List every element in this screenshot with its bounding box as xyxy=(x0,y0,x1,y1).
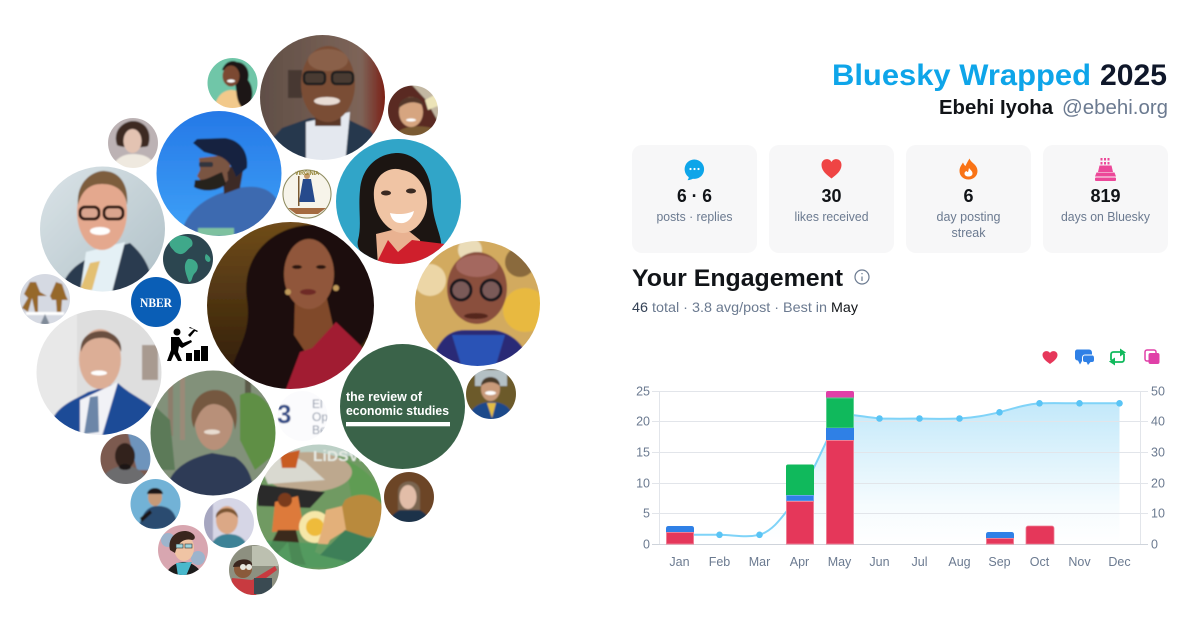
icon: birthday cake xyxy=(1095,158,1116,181)
avatar: woman with dark blazer xyxy=(383,471,435,523)
avatar: blurred text logo: Be xyxy=(312,423,327,437)
icon: info xyxy=(855,270,869,284)
avatar: man in cap on blue sky xyxy=(155,110,283,240)
value: 6: 6 xyxy=(964,186,974,206)
avatar: smiling man top right xyxy=(388,86,438,136)
label: day posting streak xyxy=(936,210,1001,240)
summary stats line: total · 3.8 avg/post · Best in xyxy=(652,299,827,315)
month labels: Sep xyxy=(988,555,1011,569)
left axis labels: 5 xyxy=(643,506,650,520)
month labels: Feb xyxy=(709,555,730,569)
avatar: man in blue jacket right xyxy=(465,368,517,420)
label: days on Bluesky: days on Bluesky xyxy=(1061,210,1151,224)
avatar: woman with bob hair xyxy=(107,117,159,170)
left axis labels: 20 xyxy=(636,414,650,428)
avatar bubble cluster xyxy=(19,33,547,596)
avatar: man in teal shirt xyxy=(203,497,255,549)
cumulative points xyxy=(676,400,1123,538)
right axis labels: 0 xyxy=(1151,538,1158,552)
month labels: Mar xyxy=(749,555,770,569)
avatar: man in forest xyxy=(148,368,280,498)
label: day posting streak: day posting xyxy=(936,210,1001,224)
avatar: cartoon woman on teal xyxy=(335,138,462,266)
user name and handle: Ebehi Iyoha xyxy=(939,97,1054,119)
icon: flame xyxy=(960,158,978,180)
gridlines and axes xyxy=(652,391,1148,544)
left axis labels xyxy=(636,384,650,552)
label: posts · replies: posts · replies xyxy=(656,210,732,224)
cumulative area xyxy=(680,403,1120,544)
avatar: top man with glasses xyxy=(258,33,387,165)
cumulative line xyxy=(680,403,1120,536)
avatar: man with beard and hoodie xyxy=(99,433,151,485)
left axis labels: 15 xyxy=(636,446,650,460)
month labels: May xyxy=(828,555,852,569)
month labels: Jan xyxy=(669,555,690,569)
icon: legend quotes squares xyxy=(1145,350,1160,364)
avatar: blurred text logo: 3 xyxy=(277,399,291,429)
icon: heart xyxy=(822,159,842,178)
icon: legend likes heart xyxy=(1042,351,1058,364)
bar: April xyxy=(786,464,814,544)
avatar: blurred text logo: Op xyxy=(312,410,328,424)
panel: likes received xyxy=(769,145,894,253)
right axis labels: 50 xyxy=(1151,384,1165,398)
month labels: Dec xyxy=(1108,555,1131,569)
month labels: Nov xyxy=(1068,555,1091,569)
label: likes received: likes received xyxy=(794,210,869,224)
user name and handle: @ebehi.org xyxy=(1062,97,1168,119)
avatar: man with round glasses in autumn xyxy=(415,241,540,366)
panel: days on Bluesky xyxy=(1043,145,1168,253)
title: Bluesky Wrapped 2025: Bluesky Wrapped xyxy=(832,59,1091,92)
right axis labels xyxy=(1151,384,1165,552)
logo text: NBER: NBER xyxy=(140,295,173,310)
avatar: main portrait woman in red xyxy=(205,220,377,395)
summary stats line: 46 xyxy=(632,299,648,315)
left axis labels: 10 xyxy=(636,476,650,490)
logo text: economic studies: economic studies xyxy=(346,403,449,418)
right axis labels: 40 xyxy=(1151,414,1165,428)
right axis labels: 10 xyxy=(1151,506,1165,520)
title: Bluesky Wrapped 2025: 2025 xyxy=(1100,59,1167,92)
avatar: NBER logo xyxy=(131,277,181,327)
avatar: cartoon with guitar xyxy=(228,544,280,596)
avatar: bronze statues xyxy=(19,273,71,325)
avatar: earth globe xyxy=(162,233,214,285)
month labels: Jul xyxy=(912,555,927,569)
left axis labels: 25 xyxy=(636,384,650,398)
avatar: Virginia state seal xyxy=(282,169,332,219)
heading: Your Engagement: Your Engagement xyxy=(632,265,843,292)
avatar: left man with tortoise glasses xyxy=(38,165,168,295)
bar: May xyxy=(826,391,854,544)
icon: miner with bar chart xyxy=(167,327,208,361)
value: 30: 30 xyxy=(822,186,842,206)
panel: posts and replies xyxy=(632,145,757,253)
bar: October xyxy=(1026,526,1054,544)
month labels: Aug xyxy=(948,555,971,569)
month labels xyxy=(669,555,1131,569)
summary stats line: May xyxy=(831,299,858,315)
bar: September xyxy=(986,532,1014,544)
user name and handle xyxy=(939,97,1168,119)
avatar: Virginia state seal: VIRGINIA xyxy=(295,171,320,177)
right axis labels: 30 xyxy=(1151,446,1165,460)
panel: day posting streak xyxy=(906,145,1031,253)
avatar: man in blue suit xyxy=(35,308,165,440)
bar: January xyxy=(666,526,694,544)
month labels: Apr xyxy=(790,555,809,569)
month labels: Oct xyxy=(1030,555,1050,569)
avatar: cartoon man with glasses xyxy=(157,524,209,576)
icon: legend reposts arrows xyxy=(1109,348,1126,366)
month labels: Jun xyxy=(869,555,890,569)
avatar: woman on mint background xyxy=(208,58,258,108)
avatar: Lidsville comic painting: LiDSVi xyxy=(313,448,363,465)
chart: monthly engagement xyxy=(636,384,1165,569)
chart legend icons xyxy=(1042,348,1160,366)
label: day posting streak: streak xyxy=(952,226,986,240)
left axis labels: 0 xyxy=(643,538,650,552)
right axis labels: 20 xyxy=(1151,476,1165,490)
avatar: Lidsville comic painting xyxy=(254,442,385,572)
logo text: the review of: the review of xyxy=(346,389,423,404)
value: 819: 819 xyxy=(1090,186,1120,206)
avatar: blurred text logo: El xyxy=(312,397,323,411)
avatar: blurred text logo xyxy=(278,398,328,435)
icon: legend replies bubbles xyxy=(1075,350,1094,365)
avatar: speaker with microphone xyxy=(130,479,180,529)
avatar: The Review of Economic Studies logo xyxy=(340,344,465,469)
value: 6 · 6: 6 · 6 xyxy=(677,186,712,206)
icon: speech bubble xyxy=(685,159,704,180)
